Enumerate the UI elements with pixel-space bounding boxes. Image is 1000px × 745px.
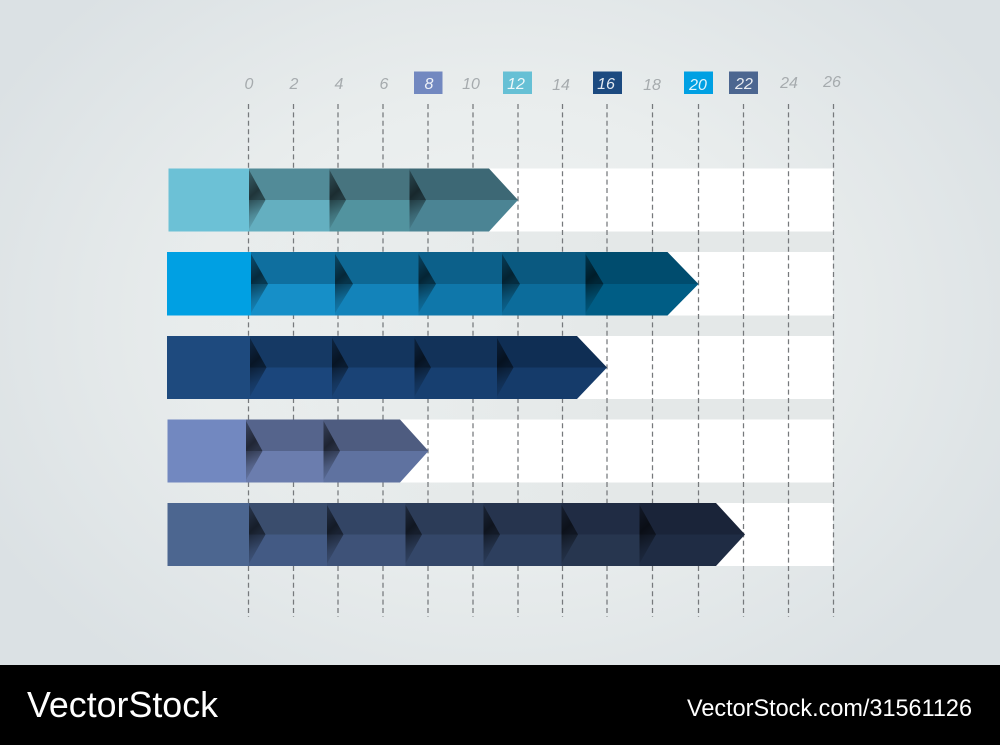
axis labels: 2: [289, 76, 299, 93]
footer image id text: VectorStock.com/31561126: [687, 695, 972, 722]
axis labels: 12: [507, 76, 525, 93]
axis labels: 24: [779, 75, 798, 92]
white chart tracks: [240, 168, 833, 566]
dashed grid lines: [248, 104, 834, 617]
axis labels: 14: [552, 77, 570, 94]
bar 5: 22: [168, 503, 745, 566]
axis labels: 20: [688, 77, 707, 94]
axis labels: 18: [643, 77, 661, 94]
axis labels: 6: [380, 76, 389, 93]
axis labels: [245, 72, 841, 94]
axis labels: 4: [335, 76, 344, 93]
axis labels: 26: [822, 74, 841, 91]
axis labels: 16: [597, 76, 615, 93]
bar 1: 12: [168, 168, 518, 232]
axis labels: 0: [245, 76, 254, 93]
bar 3: 16: [167, 336, 607, 399]
footer logo text: VectorStock: [27, 684, 219, 725]
axis labels: 10: [462, 76, 480, 93]
axis labels: 8: [425, 76, 434, 93]
bar 4: 8: [168, 420, 428, 482]
shadow bands between rows: [168, 231, 833, 503]
axis labels: 22: [734, 76, 753, 93]
bar 2: 20: [167, 252, 698, 316]
footer bar: [0, 665, 1000, 745]
